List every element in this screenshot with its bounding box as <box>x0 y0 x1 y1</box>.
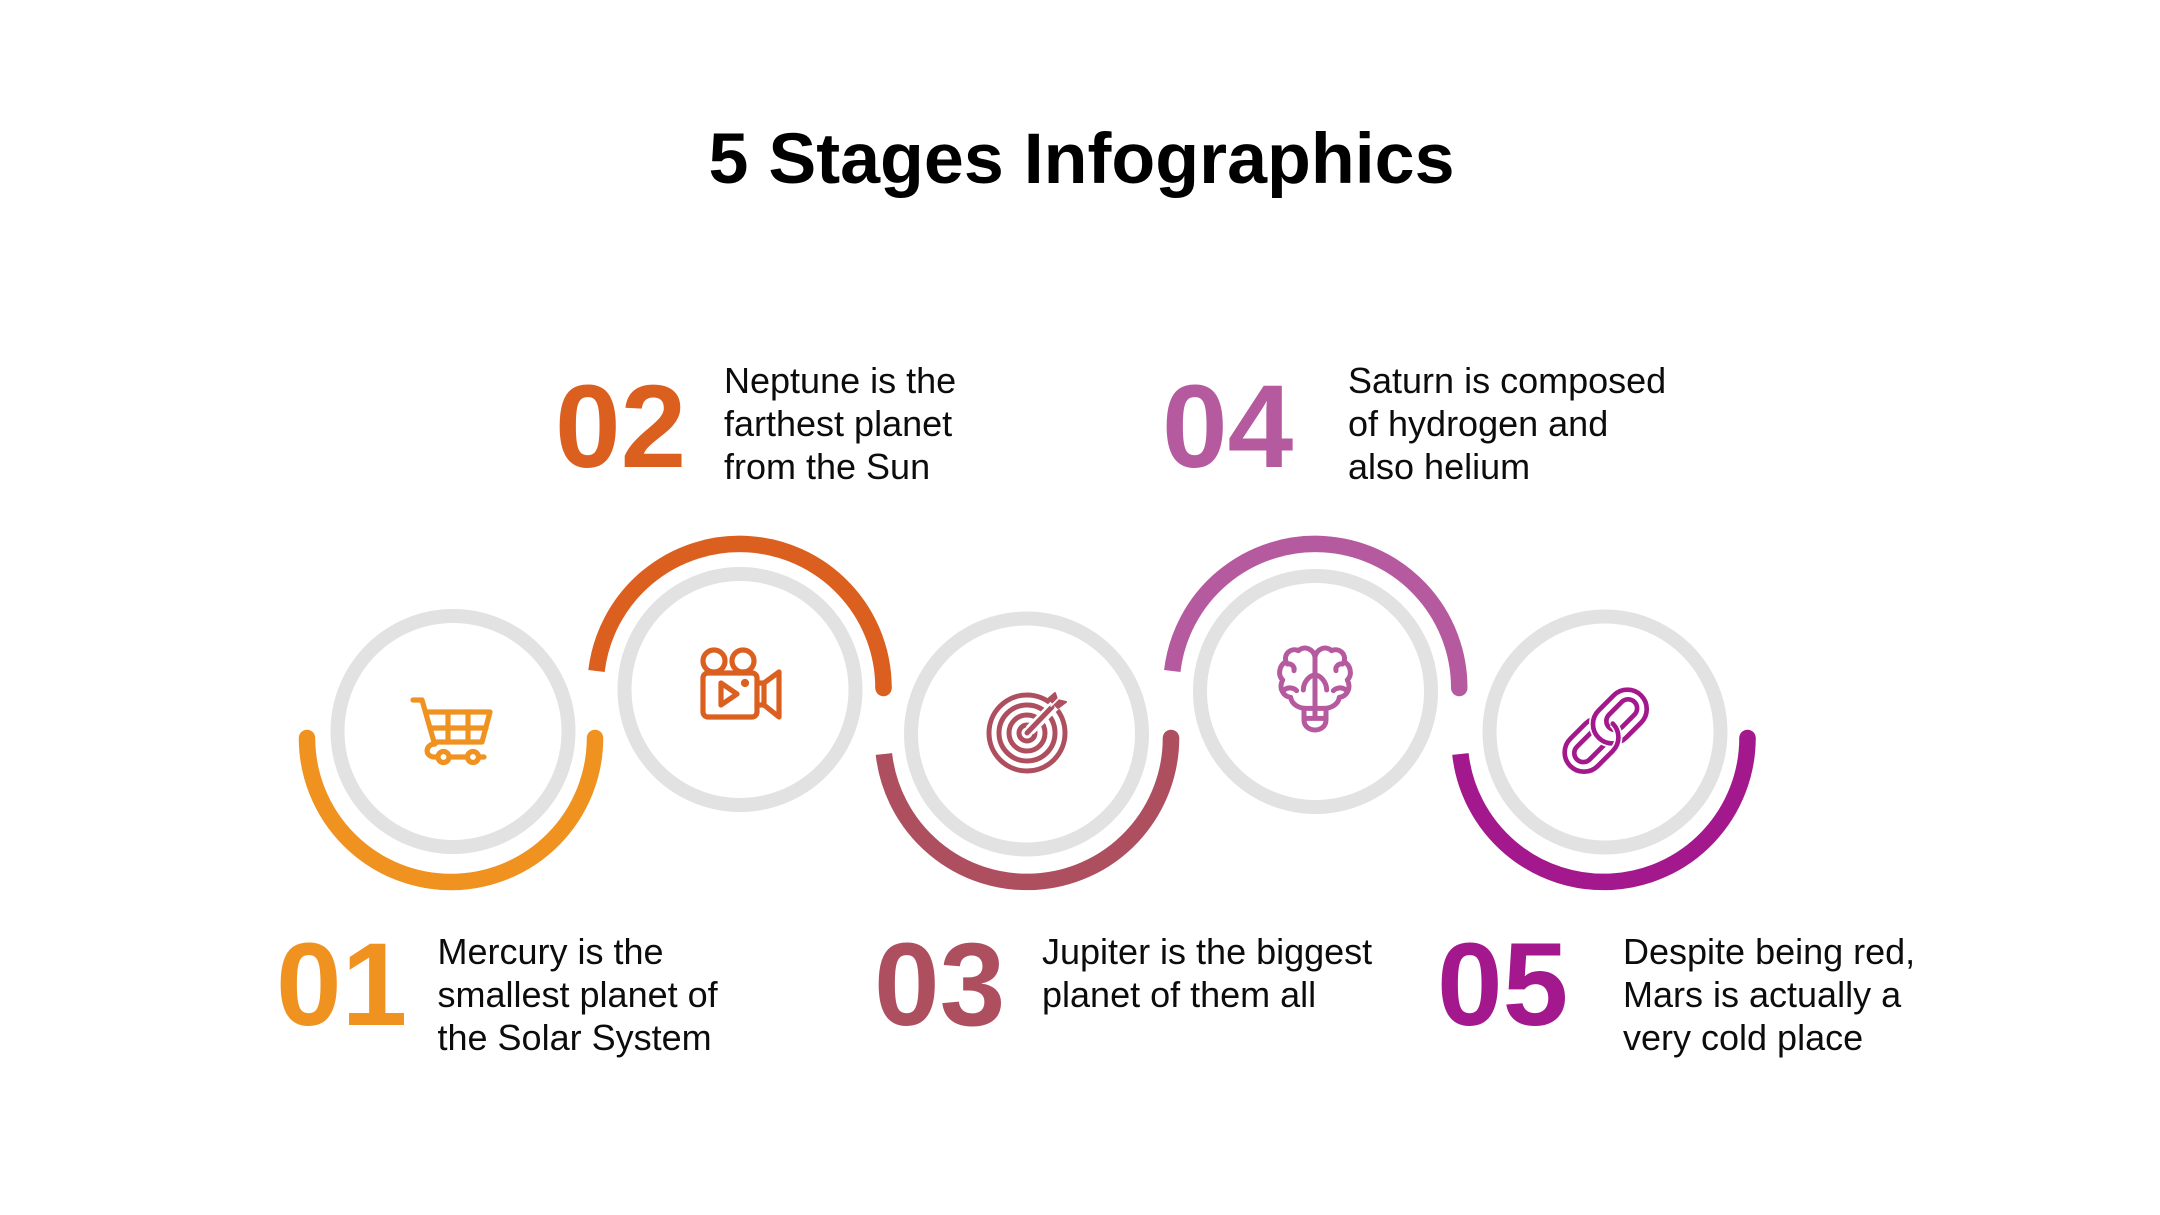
stage 5 ring <box>1460 616 1756 882</box>
stage 4 ring <box>1172 544 1468 807</box>
stage 4 text: also helium <box>1348 446 1530 487</box>
title: 5 Stages Infographics <box>708 119 1455 199</box>
stage 3 number: 03 <box>874 919 1005 1051</box>
stage 1 text: Mercury is the <box>438 931 664 972</box>
stage 4 text: of hydrogen and <box>1348 403 1608 444</box>
icon: shopping cart <box>413 700 490 762</box>
stage 4 number: 04 <box>1162 361 1293 493</box>
stage 1 text: smallest planet of <box>438 974 719 1015</box>
stage 1 text: the Solar System <box>438 1017 712 1058</box>
stage 5 number: 05 <box>1437 919 1568 1051</box>
stage 1 ring <box>307 616 595 882</box>
stage 3 text: planet of them all <box>1042 974 1316 1015</box>
stage 2 text: farthest planet <box>724 403 952 444</box>
stage 2 ring <box>596 544 892 805</box>
stage 3 text: Jupiter is the biggest <box>1042 931 1372 972</box>
icon: brain bulb <box>1280 648 1350 730</box>
stage 4 text: Saturn is composed <box>1348 360 1666 401</box>
icon: chain link <box>1557 682 1655 780</box>
stage 3 ring <box>884 618 1179 882</box>
stage 2 number: 02 <box>555 361 686 493</box>
stage 5 text: Mars is actually a <box>1623 974 1902 1015</box>
stage 5 text: Despite being red, <box>1623 931 1915 972</box>
icon: target with arrow <box>989 693 1066 771</box>
stage 2 text: from the Sun <box>724 446 930 487</box>
icon: film camera <box>703 650 779 717</box>
stage 1 number: 01 <box>276 919 407 1051</box>
stage 5 text: very cold place <box>1623 1017 1863 1058</box>
stage 2 text: Neptune is the <box>724 360 956 401</box>
